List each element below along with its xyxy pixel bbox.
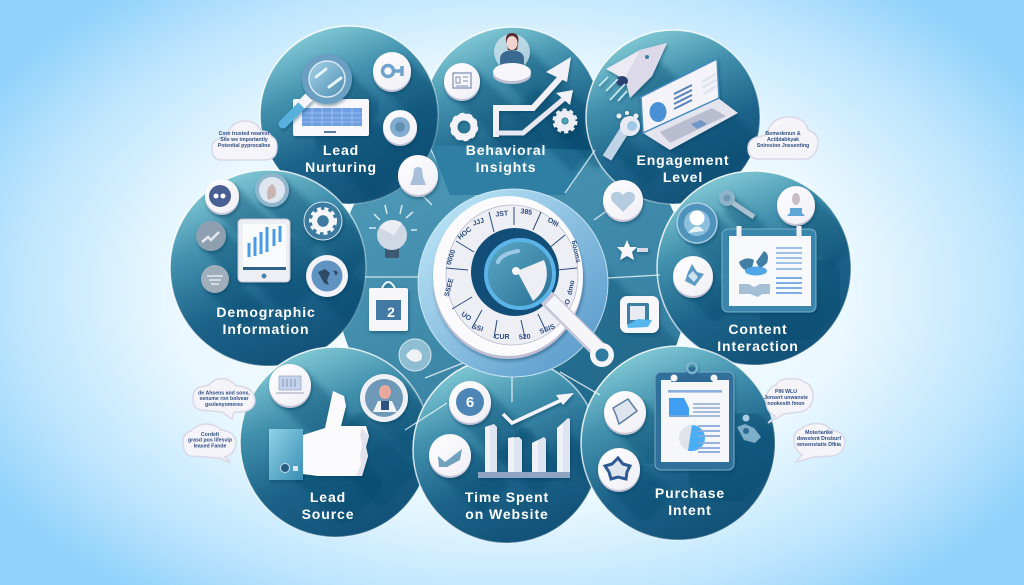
icon: rising arrows [496, 57, 573, 137]
dial: halo ring [418, 189, 608, 377]
label: content interaction: Content [728, 321, 788, 337]
icon: star button [673, 256, 713, 298]
dial scale labels: 6ooms [570, 240, 581, 264]
label: lead source: Source [302, 506, 354, 522]
callout: lead nurturing note: Potential pyprocaline [218, 143, 270, 149]
panel: purchase intent [581, 346, 775, 540]
icon: key button [373, 52, 411, 92]
callout: engagement note: Actiblabkyak [767, 137, 799, 143]
hub connector lines [365, 150, 660, 430]
dial scale labels [444, 208, 581, 342]
icon: check button [429, 434, 471, 478]
callout: lead source note one: gsolenyomeres [205, 402, 243, 408]
icon: number six button: 6 [466, 394, 474, 411]
callout: lead source note two [183, 424, 236, 463]
dial scale labels: SSEE [444, 277, 455, 298]
callout: lead source note two: leased Fande [194, 444, 227, 450]
dial scale labels: 0000 [446, 249, 457, 266]
icon: portrait button [255, 173, 289, 207]
icon: shopping bag number two: 2 [387, 304, 395, 320]
dial scale labels: HOC [457, 226, 473, 242]
dial scale labels: dmo [567, 280, 576, 296]
icon: small gear [554, 110, 576, 132]
icon: team figures [737, 414, 761, 443]
panel: content interaction [657, 171, 851, 365]
dial scale labels: 385 [520, 208, 533, 217]
icon: tablet with chart [238, 219, 290, 282]
callout: purchase note one: Jonsert unwanste [764, 395, 808, 401]
panel: lead nurturing [260, 26, 452, 204]
icon: laptop [293, 99, 369, 136]
callout: engagement note: Sniresion Jnesenting [757, 143, 809, 149]
icon: number six button [449, 381, 491, 425]
callout: purchase note one [764, 379, 813, 423]
icon: wrench [607, 111, 640, 158]
callout: lead nurturing note: Core trusted nearest [219, 131, 270, 137]
dial scale labels: UO [460, 311, 473, 323]
icon: star with bar [617, 240, 648, 260]
callout: engagement note: Bomedenun & [765, 131, 801, 137]
label: lead nurturing: Nurturing [305, 159, 377, 175]
callout: lead source note one: de Ahsens and sons, [198, 390, 250, 396]
label: time spent on website: Time Spent [465, 489, 549, 505]
callout: lead nurturing note: Site we importantly [220, 137, 268, 143]
icon: star badge button [598, 448, 640, 492]
panel: demographic information [170, 170, 367, 366]
label: engagement level: Engagement [636, 152, 730, 168]
icon: gear [452, 114, 476, 140]
icon: magnifier [283, 54, 352, 124]
label: behavioral insights: Behavioral [466, 142, 546, 158]
panel: engagement level [586, 30, 760, 204]
callout: lead source note one: sensme ron bolvear [199, 396, 249, 402]
icon: glass orb [677, 203, 717, 243]
dial scale labels: JJJ [472, 217, 485, 228]
icon: shopping bag number two [369, 282, 408, 331]
chart: growth bars [478, 393, 574, 478]
callout: purchase note two [794, 424, 845, 462]
icon: globe button [306, 255, 348, 297]
callout: purchase note two: wnsenstatis Dfkia [796, 442, 841, 448]
panel: behavioral insights [424, 27, 605, 203]
panel: time spent on website [413, 357, 599, 543]
panel: lead source [240, 347, 430, 537]
callout: purchase note one: nookesth fmon [767, 401, 805, 407]
icon: person on plinth [493, 33, 531, 84]
label: engagement level: Level [663, 169, 703, 185]
icon: avatar badge [360, 374, 408, 422]
dial scale labels: SSIS [539, 323, 556, 336]
icon: glass bubble [399, 339, 431, 371]
icon: calendar document [722, 226, 816, 312]
icon: grey badge button [201, 265, 229, 293]
label: behavioral insights: Insights [476, 159, 536, 175]
callout: lead source note two: grasd pos lifesvip [188, 438, 232, 444]
icon: target button [383, 110, 417, 146]
icon: laptop button [269, 364, 311, 408]
callout: purchase note two: Moterlarike [805, 430, 833, 436]
central teal hub area [343, 150, 681, 406]
label: demographic information: Information [223, 321, 309, 337]
icon: rocket [599, 43, 667, 101]
icon: light bulb [369, 205, 417, 258]
callout: engagement note [748, 117, 818, 159]
callout: lead source note two: Cordelt [201, 432, 219, 438]
label: lead nurturing: Lead [323, 142, 359, 158]
icon: device tile [620, 296, 659, 333]
dial scale labels: JST [495, 210, 509, 219]
dial scale labels: OIII [546, 217, 559, 229]
dial: score gauge [433, 196, 583, 359]
dial scale labels: SSO [559, 298, 573, 314]
callout: purchase note one: PIN WLU [775, 389, 797, 395]
dial tick marks [446, 207, 577, 338]
dial scale labels: CUR [494, 334, 510, 341]
label: time spent on website: on Website [465, 506, 549, 522]
label: lead source: Lead [310, 489, 346, 505]
icon: thumbs up [269, 391, 369, 480]
label: demographic information: Demographic [216, 304, 316, 320]
icon: heart button [603, 180, 643, 222]
label: purchase intent: Purchase [655, 485, 725, 501]
icon: person button on nurturing edge [398, 155, 438, 197]
label: purchase intent: Intent [668, 502, 712, 518]
callout: lead source note one [193, 379, 255, 419]
icon: gear button [304, 202, 342, 240]
callout: purchase note two: dowstent Dnsburf [797, 436, 841, 442]
icon: clipboard report [655, 363, 734, 470]
dial scale labels: 520 [519, 334, 531, 342]
dial scale labels: SSI [471, 324, 484, 333]
label: content interaction: Interaction [717, 338, 799, 354]
icon: person button [777, 186, 815, 226]
icon: grey button [196, 221, 226, 251]
icon: circle button [205, 179, 239, 215]
icon: key [719, 190, 754, 217]
icon: magnifying glass over gauge [486, 240, 614, 367]
icon: document button [444, 63, 480, 101]
icon: star outline button [604, 391, 646, 435]
callout: lead nurturing note [212, 121, 277, 160]
icon: laptop with chart [641, 59, 738, 150]
